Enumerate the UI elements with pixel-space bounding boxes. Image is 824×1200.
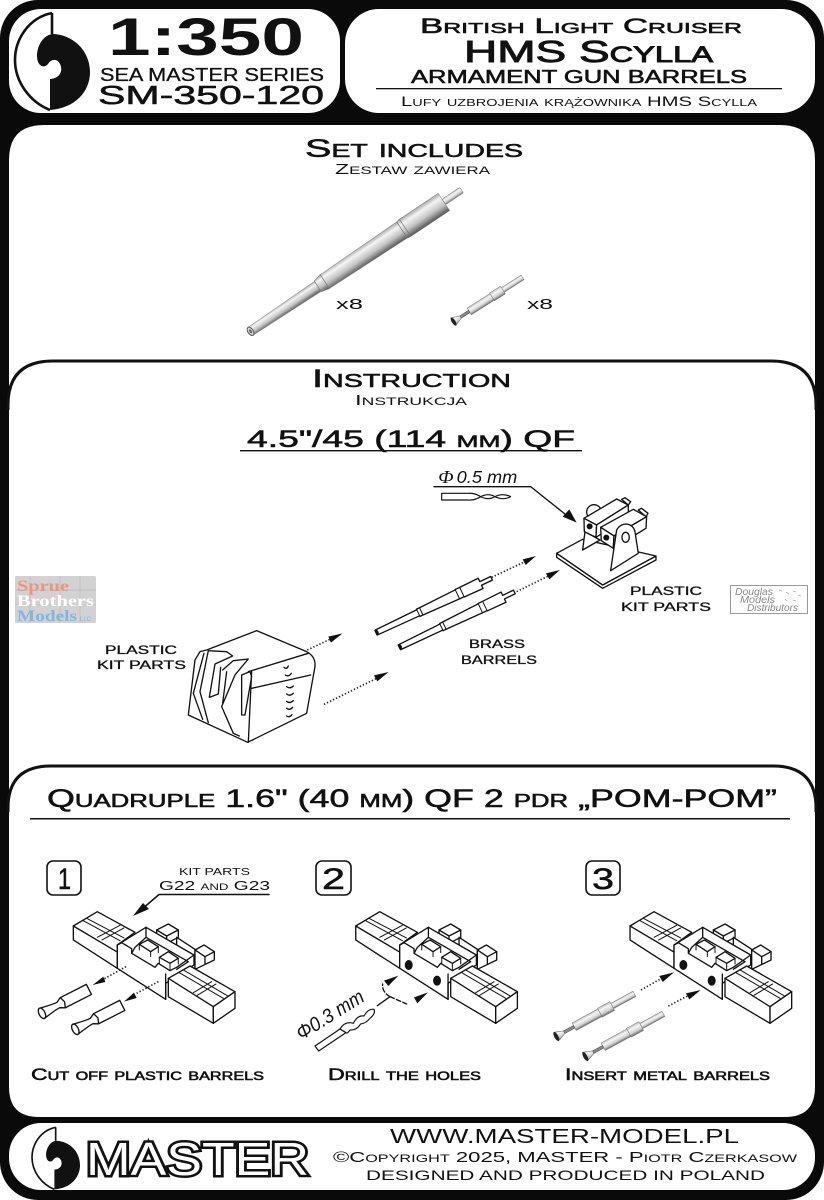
footer panel <box>9 1123 815 1190</box>
step 3 caption: Insert metal barrels <box>565 1065 770 1084</box>
step 1 caption: Cut off plastic barrels <box>31 1065 264 1084</box>
Polish subheading: Instrukcja <box>355 392 468 409</box>
scale title: 1:350 <box>108 8 304 67</box>
quantity large barrel: x8 <box>336 296 363 313</box>
step 3 <box>552 861 792 1084</box>
label plastic kit parts left <box>97 643 186 672</box>
header panel: product title <box>345 9 815 113</box>
step 2 caption: Drill the holes <box>328 1065 481 1084</box>
plastic gun shield <box>188 631 389 742</box>
gun heading: 4.5"/45 (114 mm) QF <box>247 426 575 453</box>
turret block step 1 <box>37 912 235 1036</box>
small barrel <box>450 274 525 326</box>
label brass barrels: BRASS <box>469 637 525 651</box>
icon: Master swirl logo <box>15 13 90 110</box>
turret block step 3 <box>630 912 792 1023</box>
step 2 <box>292 861 517 1084</box>
heading set includes: Set includes <box>305 135 523 163</box>
kit parts callout <box>133 866 270 916</box>
turret block step 2 <box>356 912 517 1023</box>
watermark: Sprue Brothers Models: Models <box>17 608 77 625</box>
large barrel <box>243 181 467 341</box>
watermark: Sprue Brothers Models: Sprue <box>17 578 69 595</box>
step 2 number <box>316 861 351 896</box>
drill callout: 0.5 mm <box>457 467 517 487</box>
icon: footer swirl logo <box>32 1127 80 1189</box>
kit parts callout: KIT PARTS <box>179 866 250 878</box>
panel: set includes <box>9 125 815 400</box>
step 1 number <box>47 861 81 896</box>
title line British Light Cruiser: British Light Cruiser <box>420 15 742 38</box>
label plastic kit parts right <box>621 584 711 614</box>
production note: DESIGNED AND PRODUCED IN POLAND <box>366 1167 765 1183</box>
plastic gun mount <box>557 498 656 588</box>
pom-pom heading: Quadruple 1.6" (40 mm) QF 2 pdr „POM-POM” <box>47 785 777 813</box>
label brass barrels <box>461 637 537 667</box>
watermark: Douglas Models Distributors: Models <box>740 595 775 606</box>
step 3 number: 3 <box>592 863 614 896</box>
kit parts callout: G22 and G23 <box>159 878 270 893</box>
Polish subtitle: Lufy uzbrojenia krążownika HMS Scylla <box>401 93 757 109</box>
panel: instruction <box>8 361 816 790</box>
step 1 <box>31 861 270 1084</box>
watermark: Douglas Models Distributors: Distributors <box>747 603 798 614</box>
title line armament: ARMAMENT GUN BARRELS <box>411 67 747 87</box>
Polish subheading: Zestaw zawiera <box>335 161 491 178</box>
heading instruction: Instruction <box>312 365 511 393</box>
label plastic kit parts right: KIT PARTS <box>621 600 711 614</box>
website: WWW.MASTER-MODEL.PL <box>390 1126 739 1148</box>
drill and size <box>292 976 428 1051</box>
watermark: Douglas Models Distributors <box>730 586 808 614</box>
watermark: Sprue Brothers Models: Brothers <box>17 593 94 610</box>
copyright: ©Copyright 2025, MASTER - Piotr Czerkasow <box>333 1149 798 1166</box>
watermark: Douglas Models Distributors: Douglas <box>735 587 773 598</box>
label plastic kit parts left: KIT PARTS <box>97 658 186 672</box>
metal barrels and arrows <box>552 972 701 1062</box>
brass barrels <box>373 556 560 653</box>
drill callout <box>434 467 577 523</box>
label plastic kit parts right: PLASTIC <box>630 584 702 598</box>
MASTER wordmark: MASTER <box>86 1133 309 1185</box>
title line HMS Scylla: HMS Scylla <box>464 34 713 69</box>
series name: SEA MASTER SERIES <box>100 65 324 85</box>
step 2 number: 2 <box>322 863 345 896</box>
header panel: scale and series <box>9 8 340 113</box>
quantity small barrel: x8 <box>527 296 553 313</box>
panel: pom-pom instructions <box>8 766 816 1117</box>
step 3 number <box>586 861 620 896</box>
label plastic kit parts left: PLASTIC <box>105 643 177 657</box>
product code: SM-350-120 <box>98 80 324 110</box>
step 1 number: 1 <box>58 863 71 896</box>
drill and size: Φ0.3 mm <box>292 986 368 1045</box>
watermark: Sprue Brothers Models <box>15 576 96 625</box>
drill callout: Φ <box>438 467 454 487</box>
watermark: Sprue Brothers Models: LLC <box>80 617 92 623</box>
label brass barrels: BARRELS <box>461 653 537 667</box>
